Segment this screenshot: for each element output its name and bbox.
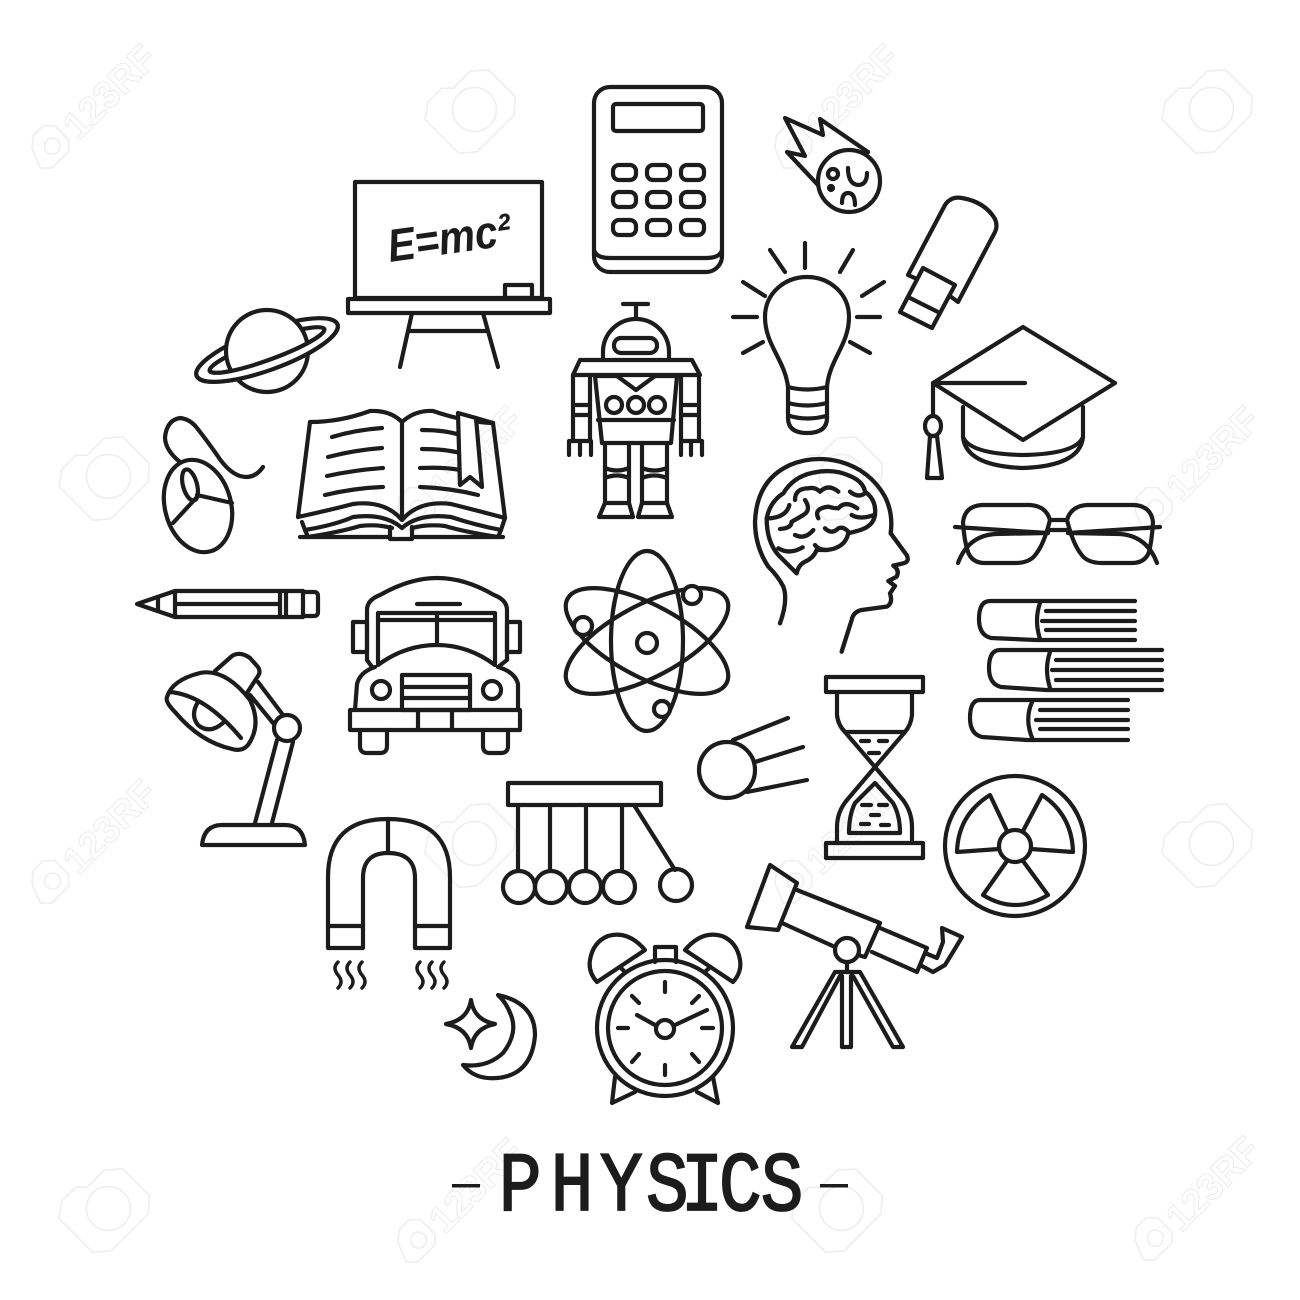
icon: alarm clock: [590, 935, 740, 1103]
icon: light bulb: [733, 243, 884, 433]
watermarks: 123RF: [798, 772, 909, 883]
icon: newton's cradle: [503, 783, 692, 903]
title dash left: [452, 1184, 480, 1188]
icon: pencil: [137, 591, 318, 617]
icon: desk lamp: [167, 654, 305, 845]
icon: planet with ring: [190, 306, 344, 394]
icon: blackboard with formula: [348, 182, 550, 367]
watermarks: 123RF: [798, 37, 909, 148]
icon: glasses: [955, 505, 1160, 563]
icon: graduation cap: [925, 327, 1115, 478]
icon: horseshoe magnet: [328, 819, 450, 988]
icon: robot: [569, 304, 702, 517]
icon: stack of books: [970, 601, 1162, 740]
icon: head with brain: [755, 459, 908, 652]
title dash right: [820, 1184, 848, 1188]
icon: comet: [785, 118, 880, 212]
watermarks: 123RF: [421, 1131, 532, 1242]
icon: star and moon: [446, 995, 535, 1078]
watermarks: 123RF: [1158, 399, 1269, 510]
watermarks: 123RF: [55, 772, 166, 883]
icon: atom: [551, 551, 743, 731]
watermarks: 123RF: [55, 37, 166, 148]
icon: blackboard with formula: E=mc²: [384, 203, 516, 272]
icon: radiation sign: [945, 776, 1085, 916]
icon: usb stick: [900, 198, 996, 328]
icon: telescope: [747, 865, 962, 1047]
title: PHYSICS: [499, 1141, 803, 1236]
icon: computer mouse: [154, 418, 263, 560]
icon: calculator: [594, 87, 722, 272]
watermarks: 123RF: [1158, 1129, 1269, 1240]
watermarks: 123RF: [421, 399, 532, 510]
icon: hourglass: [826, 677, 923, 858]
icon: open book: [298, 411, 505, 539]
icon: school bus: [350, 578, 520, 753]
icon: comet ball: [699, 718, 807, 798]
